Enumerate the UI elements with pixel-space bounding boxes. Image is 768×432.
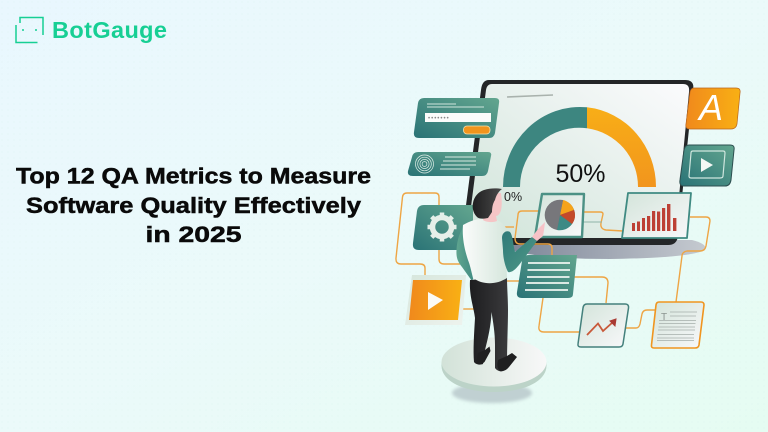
title: in 2025	[146, 222, 242, 247]
icon: play	[428, 292, 443, 310]
person	[456, 188, 545, 371]
icon: gear	[428, 212, 456, 242]
icon: trend arrow	[587, 319, 616, 335]
card: pie chart	[535, 194, 584, 237]
login button	[464, 126, 490, 134]
document letter T: T	[661, 312, 667, 323]
icon: play	[701, 158, 713, 172]
card: text lines	[517, 255, 577, 298]
bars	[632, 204, 676, 231]
logo: BotGauge	[16, 17, 167, 43]
icon: fingerprint	[416, 155, 434, 173]
icon: logo bot face	[16, 18, 43, 42]
gauge value: 50%	[555, 160, 606, 188]
monitor shadow	[510, 240, 705, 259]
card: login form: •••••••	[428, 116, 450, 122]
neck and face	[483, 193, 502, 222]
card: fingerprint	[408, 152, 491, 176]
shirt	[463, 219, 507, 283]
pie chart	[545, 200, 575, 230]
right arm	[502, 231, 537, 272]
hair	[473, 188, 502, 219]
card: trend arrow	[578, 304, 629, 347]
title: Top 12 QA Metrics to Measure	[16, 164, 371, 188]
shoes	[476, 346, 517, 371]
card: settings gear	[413, 205, 473, 250]
connector lines	[396, 193, 710, 332]
title: Software Quality Effectively	[26, 193, 362, 218]
gauge chart	[503, 107, 656, 204]
tile: letter A	[686, 87, 740, 129]
illustration	[396, 80, 740, 403]
card: orange video	[405, 275, 466, 325]
platform	[442, 338, 546, 392]
legs	[470, 277, 508, 371]
platform shadow	[452, 383, 532, 403]
password field	[425, 113, 491, 122]
card: login form	[414, 98, 499, 138]
card: text document	[651, 302, 704, 348]
monitor screen	[468, 84, 689, 238]
left arm	[456, 224, 477, 281]
gauge min label: 0%	[504, 190, 522, 204]
logo wordmark: BotGauge	[52, 17, 167, 43]
card: bar chart	[622, 193, 691, 238]
title	[16, 164, 371, 247]
hand	[532, 222, 545, 241]
tile: letter A: A	[697, 87, 723, 128]
monitor	[462, 80, 693, 245]
tile: video play	[680, 145, 734, 186]
